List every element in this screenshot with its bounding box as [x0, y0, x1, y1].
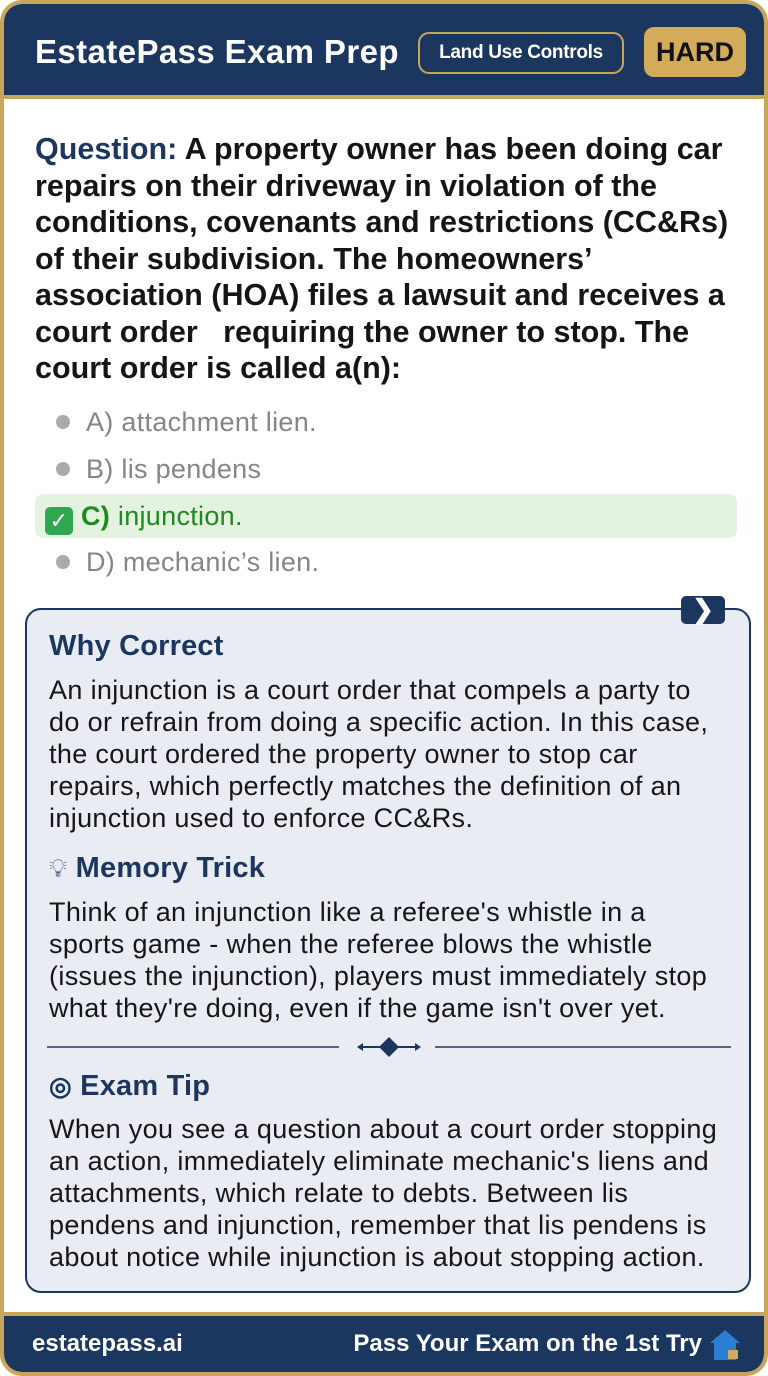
title: EstatePass Exam Prep — [35, 33, 399, 70]
question: court order is called a(n): — [35, 351, 401, 385]
explanation panel — [25, 608, 751, 1293]
question: conditions, covenants and restrictions (CC&Rs) — [35, 205, 728, 239]
option A: A) attachment lien. — [86, 407, 317, 437]
question: association (HOA) files a lawsuit and receives a — [35, 278, 725, 312]
icon: house — [710, 1330, 740, 1360]
text: why correct — [49, 675, 708, 833]
text: why correct: repairs, which perfectly matches the definition of an — [49, 771, 681, 801]
divider — [47, 1037, 731, 1057]
text: exam tip: attachments, which relate to debts. Between lis — [49, 1178, 628, 1208]
difficulty badge: HARD — [656, 37, 734, 67]
text: why correct: An injunction is a court order that compels a party to — [49, 675, 691, 705]
text: memory trick: what they're doing, even if the game isn't over yet. — [49, 993, 666, 1023]
difficulty badge — [644, 27, 746, 77]
footer url: estatepass.ai — [32, 1330, 183, 1357]
text: exam tip — [49, 1114, 717, 1272]
text: exam tip: When you see a question about a court order stopping — [49, 1114, 717, 1144]
text: exam tip: pendens and injunction, remember that lis pendens is — [49, 1210, 707, 1240]
header — [4, 4, 764, 99]
question: repairs on their driveway in violation of the — [35, 168, 657, 202]
text: exam tip: about notice while injunction is about stopping action. — [49, 1242, 705, 1272]
footer tagline: Pass Your Exam on the 1st Try — [353, 1330, 702, 1357]
question — [35, 132, 728, 385]
corner tab icon: ❯ — [692, 594, 714, 624]
footer — [4, 1312, 764, 1376]
text: memory trick: (issues the injunction), players must immediately stop — [49, 961, 707, 991]
corner tab icon — [681, 596, 725, 624]
heading: exam tip: ◎ Exam Tip — [49, 1070, 210, 1102]
heading: memory trick: 💡︎ Memory Trick — [49, 852, 265, 884]
text: why correct: the court ordered the property owner to stop car — [49, 739, 638, 769]
heading: why correct: Why Correct — [49, 630, 224, 662]
option B: B) lis pendens — [86, 454, 261, 484]
topic pill: Land Use Controls — [439, 42, 603, 63]
text: why correct: injunction used to enforce CC&Rs. — [49, 803, 473, 833]
topic pill — [418, 32, 624, 74]
question: Question: A property owner has been doing car — [35, 132, 722, 166]
option D: D) mechanic’s lien. — [86, 547, 319, 577]
text: why correct: do or refrain from doing a specific action. In this case, — [49, 707, 708, 737]
option C correct: C) injunction. — [81, 501, 243, 531]
text: memory trick — [49, 897, 707, 1023]
option C correct: ✓ — [50, 508, 68, 533]
question: court order requiring the owner to stop. The — [35, 314, 689, 348]
text: memory trick: Think of an injunction like a referee's whistle in a — [49, 897, 646, 927]
question: of their subdivision. The homeowners’ — [35, 242, 593, 276]
option C correct — [35, 494, 737, 538]
text: exam tip: an action, immediately eliminate mechanic's liens and — [49, 1146, 709, 1176]
text: memory trick: sports game - when the referee blows the whistle — [49, 929, 653, 959]
